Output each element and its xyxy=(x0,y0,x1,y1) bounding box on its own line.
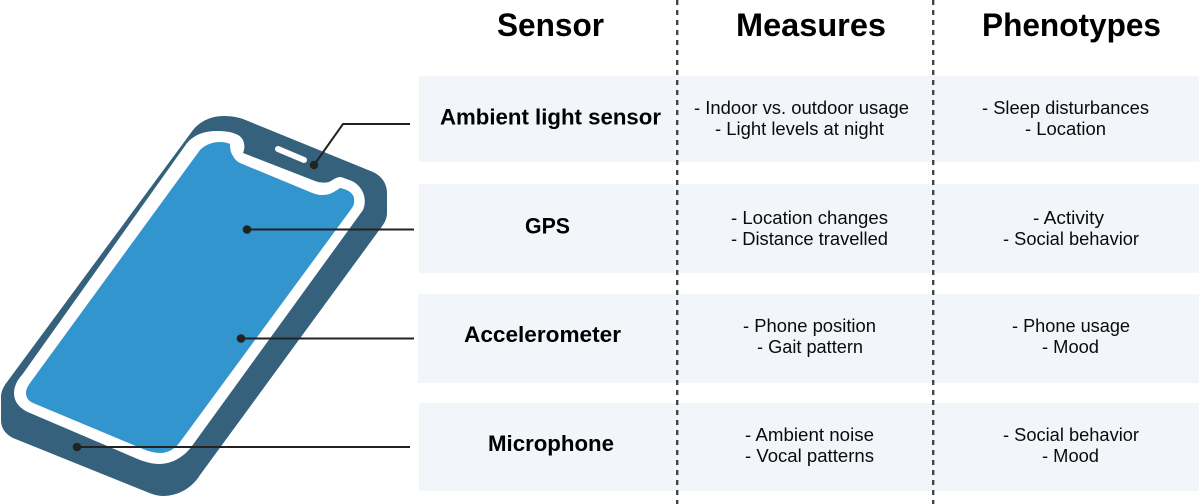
measures: GPS: - Location changes xyxy=(731,208,888,228)
phenotypes: accelerometer: - Mood xyxy=(1042,337,1099,357)
measures: microphone xyxy=(745,425,874,466)
panel: GPS row xyxy=(419,184,1199,273)
phenotypes: microphone: - Mood xyxy=(1042,446,1099,466)
measures: ambient light sensor: - Indoor vs. outdoor usage xyxy=(694,98,909,118)
phenotypes: ambient light sensor xyxy=(982,98,1149,139)
speaker slot xyxy=(278,149,304,160)
phenotypes: GPS xyxy=(1003,208,1139,249)
measures: accelerometer xyxy=(743,316,876,357)
measures: accelerometer: - Gait pattern xyxy=(757,337,863,357)
measures: microphone: - Ambient noise xyxy=(745,425,874,445)
measures: GPS: - Distance travelled xyxy=(731,229,888,249)
measures: accelerometer: - Phone position xyxy=(743,316,876,336)
phenotypes: ambient light sensor: - Location xyxy=(1025,119,1106,139)
phenotypes: accelerometer xyxy=(1012,316,1130,357)
callout line: ambient light sensor xyxy=(310,124,410,169)
phenotypes: accelerometer: - Phone usage xyxy=(1012,316,1130,336)
sensor label: ambient light sensor: Ambient light sensor xyxy=(440,104,661,130)
phone body xyxy=(1,116,387,496)
callout line: GPS xyxy=(243,225,414,234)
panel: microphone row xyxy=(419,403,1199,491)
icon: smartphone xyxy=(1,116,387,496)
callout line: microphone xyxy=(73,443,410,451)
heading: Measures: Measures xyxy=(736,7,886,43)
phenotypes: microphone: - Social behavior xyxy=(1003,425,1139,445)
measures: microphone: - Vocal patterns xyxy=(745,446,874,466)
panel: ambient light sensor row xyxy=(419,76,1199,162)
sensor label: accelerometer: Accelerometer xyxy=(464,322,621,347)
measures: GPS xyxy=(731,208,888,249)
sensor label: GPS: GPS xyxy=(525,214,570,238)
phenotypes: microphone xyxy=(1003,425,1139,466)
heading: Phenotypes: Phenotypes xyxy=(982,7,1161,43)
heading: Sensor: Sensor xyxy=(497,7,604,43)
phenotypes: ambient light sensor: - Sleep disturbances xyxy=(982,98,1149,118)
panel: accelerometer row xyxy=(418,294,1199,383)
phone screen bezel xyxy=(14,131,365,464)
sensor label: microphone: Microphone xyxy=(488,431,614,456)
phenotypes: GPS: - Activity xyxy=(1033,208,1104,228)
phone screen xyxy=(26,142,354,453)
callout line: accelerometer xyxy=(237,334,414,343)
measures: ambient light sensor: - Light levels at night xyxy=(715,119,884,139)
measures: ambient light sensor xyxy=(694,98,909,139)
phenotypes: GPS: - Social behavior xyxy=(1003,229,1139,249)
